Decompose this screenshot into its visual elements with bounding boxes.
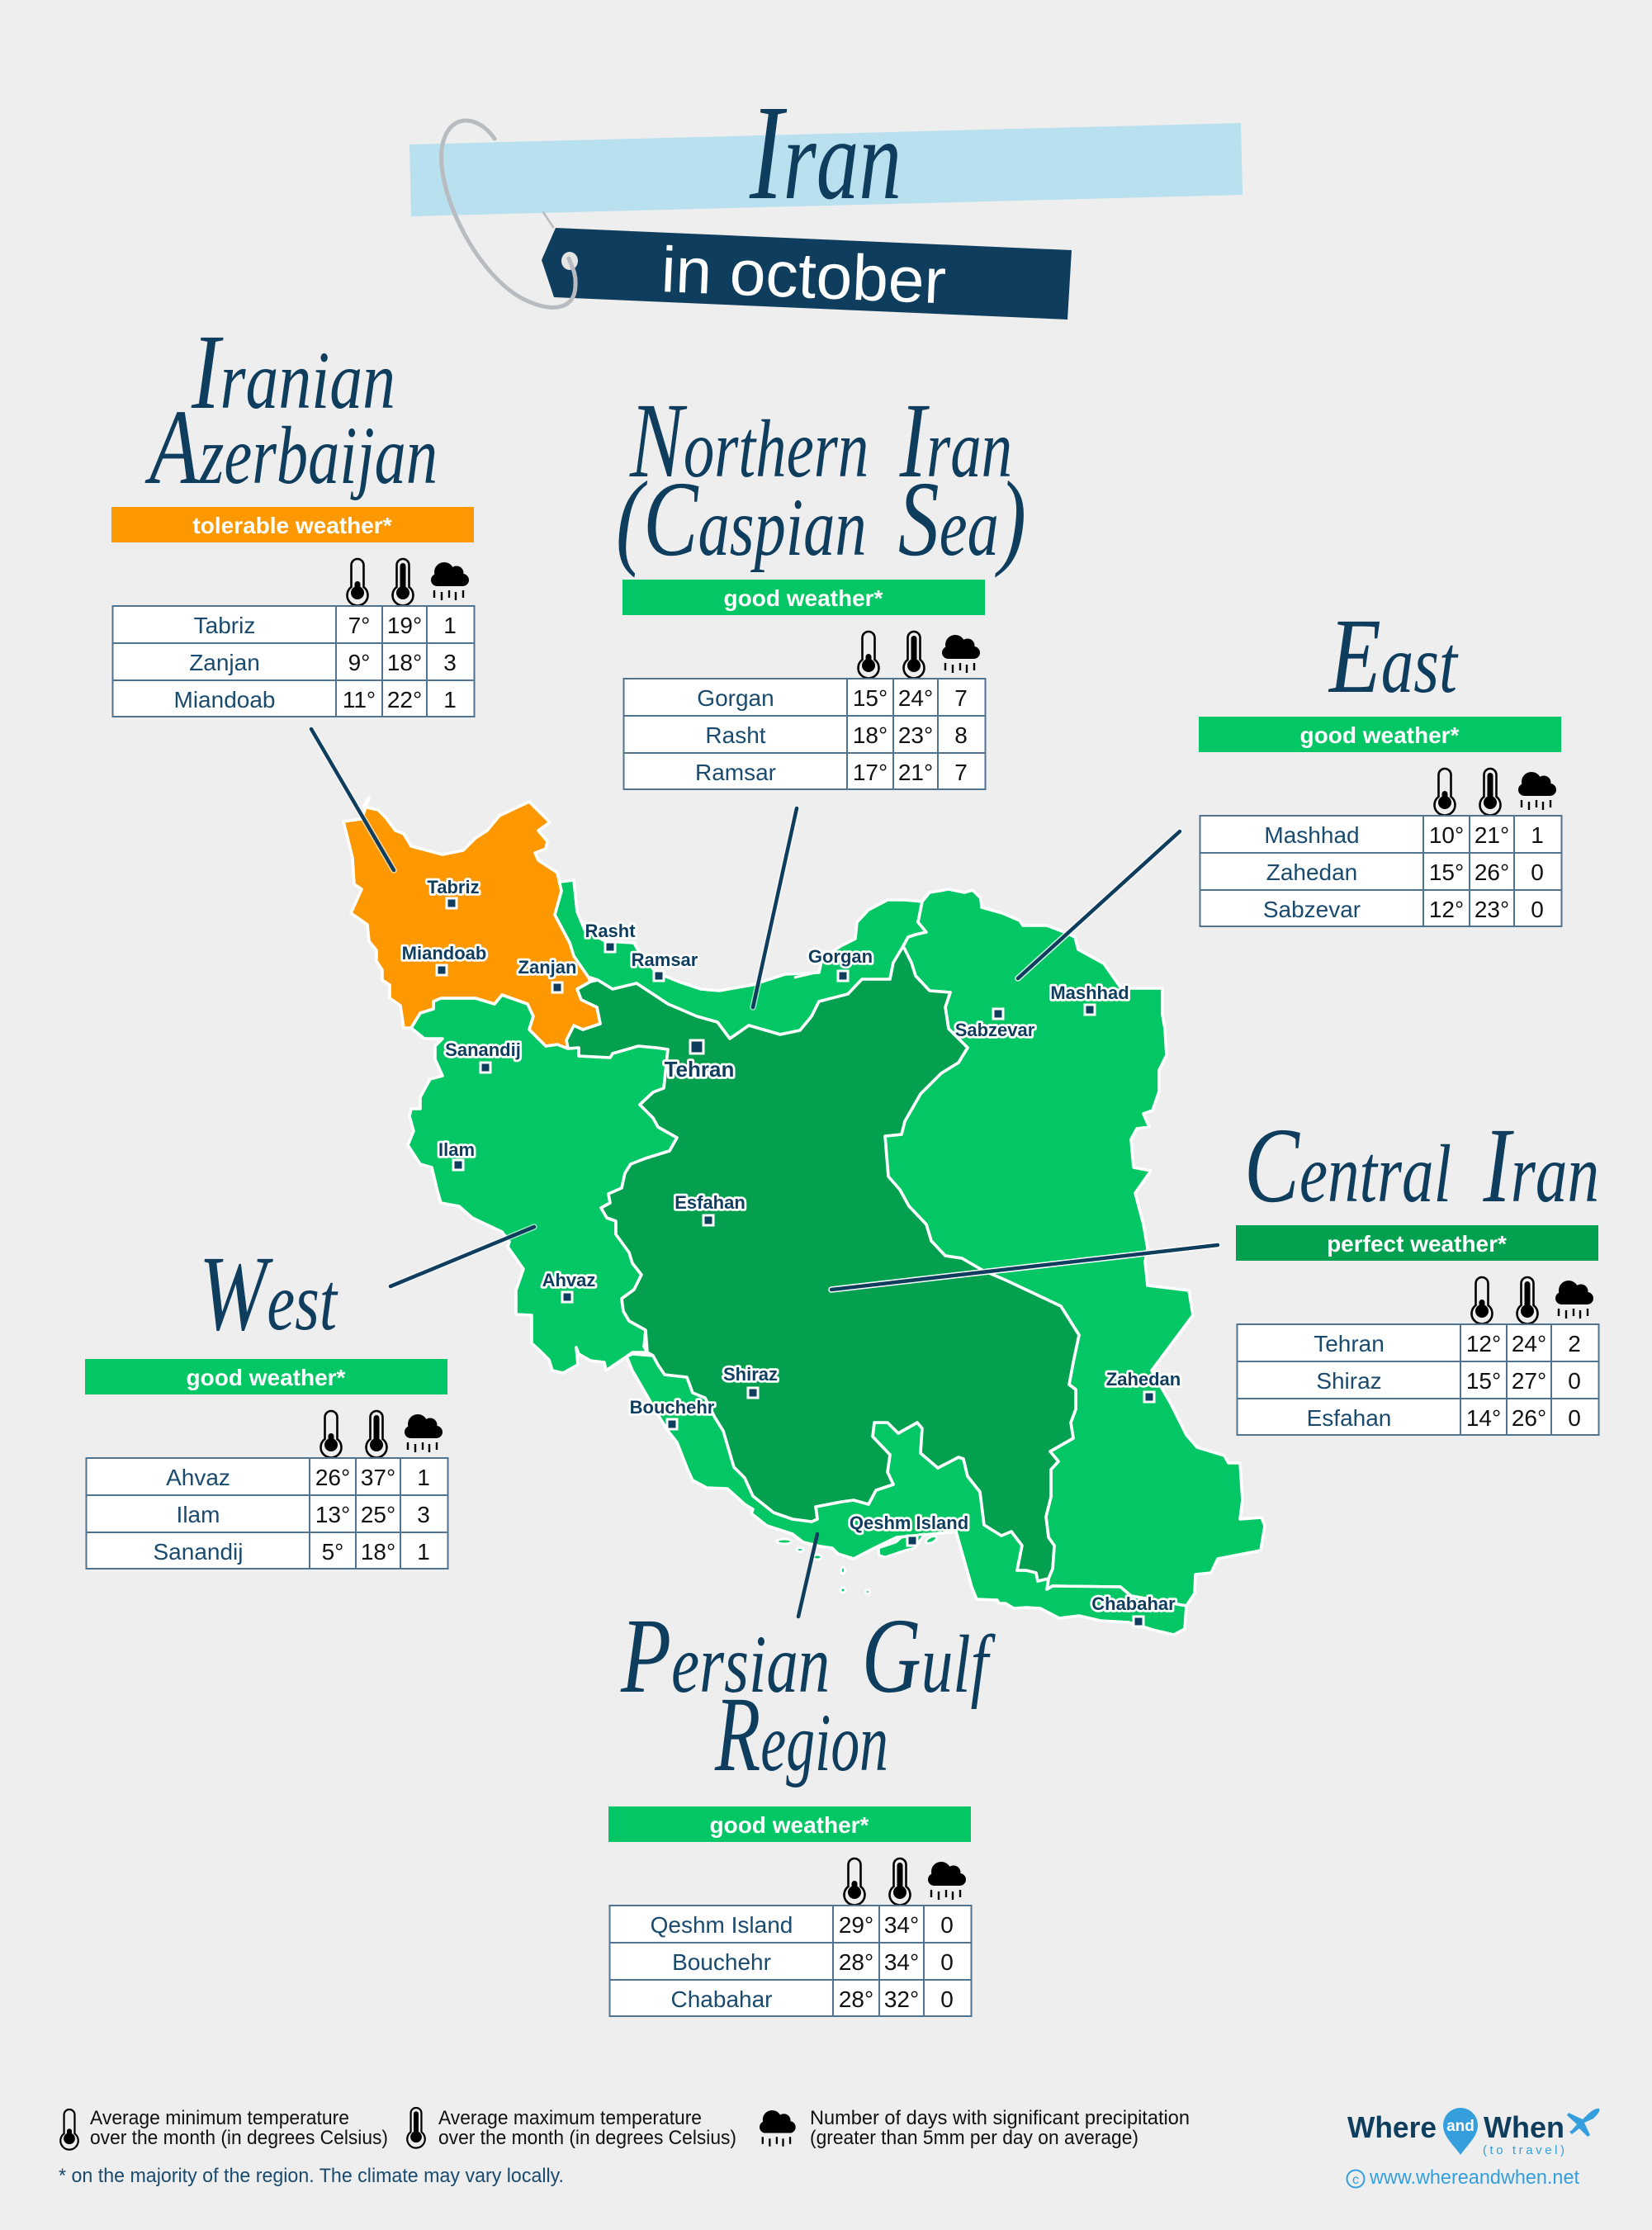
legend: maximum temperature: over the month (in degrees Celsius) xyxy=(438,2127,736,2149)
weather table: East: Mashhad xyxy=(1264,822,1360,848)
weather table: Persian Gulf Region: 34° xyxy=(884,1949,919,1975)
weather table: Northern Iran: 24° xyxy=(898,685,933,711)
legend: maximum temperature xyxy=(407,2107,736,2149)
weather table: Northern Iran: Ramsar xyxy=(695,760,776,785)
weather table: Northern Iran: 23° xyxy=(898,722,933,748)
heading: Persian Gulf Region xyxy=(620,1597,996,1794)
weather table: Persian Gulf Region: 0 xyxy=(940,1949,954,1975)
weather table: East: 1 xyxy=(1531,822,1544,848)
weather table: Central Iran: Shiraz xyxy=(1316,1368,1382,1394)
city markers and labels: Miandoab xyxy=(402,943,486,963)
weather table: Iranian Azerbaijan: Miandoab xyxy=(174,687,275,713)
weather table: Iranian Azerbaijan: 3 xyxy=(443,650,457,675)
city markers and labels: Ilam xyxy=(438,1139,475,1160)
logo: Where and When xyxy=(1347,2108,1599,2189)
weather table: Northern Iran: 18° xyxy=(853,722,888,748)
weather table: Iranian Azerbaijan: 7° xyxy=(348,613,370,638)
heading: Iranian Azerbaijan: Azerbaijan xyxy=(144,388,438,507)
city markers and labels: Tehran xyxy=(665,1057,734,1082)
city markers and labels: Gorgan xyxy=(808,946,873,967)
weather table: Persian Gulf Region: 32° xyxy=(884,1986,919,2012)
legend: maximum temperature: Average maximum temperature xyxy=(438,2107,702,2129)
weather table: Iranian Azerbaijan: 11° xyxy=(343,687,376,713)
islands xyxy=(777,1534,938,1593)
weather table: West: Ilam xyxy=(177,1502,220,1527)
weather table: West: 18° xyxy=(361,1539,395,1565)
weather table: Central Iran: Tehran xyxy=(1314,1331,1385,1356)
title: Iran: Iran xyxy=(749,77,902,228)
weather table: Persian Gulf Region: 29° xyxy=(839,1912,873,1938)
weather table: Central Iran: 0 xyxy=(1568,1405,1581,1431)
city markers and labels: Ramsar xyxy=(632,949,698,970)
weather table: Central Iran: 26° xyxy=(1512,1405,1546,1431)
weather table: East: Zahedan xyxy=(1266,859,1357,885)
region: East xyxy=(885,889,1265,1606)
weather table: Iranian Azerbaijan: 22° xyxy=(387,687,422,713)
heading: Northern Iran (Caspian Sea) xyxy=(616,381,1026,579)
weather table: Persian Gulf Region: 28° xyxy=(839,1949,873,1975)
logo: Where and When: Where xyxy=(1347,2110,1437,2144)
region: Central Iran xyxy=(566,946,1079,1581)
leader: Persian Gulf xyxy=(798,1534,817,1617)
city markers and labels xyxy=(402,877,1181,1626)
leader: Northern Iran xyxy=(753,808,797,1007)
weather table: Iranian Azerbaijan: Zanjan xyxy=(189,650,260,675)
region: Northern Iran xyxy=(555,877,926,1039)
weather table: East: 12° xyxy=(1429,897,1464,922)
region: Persian Gulf xyxy=(627,1354,1186,1635)
website: www.whereandwhen.net xyxy=(1369,2166,1579,2189)
city markers and labels: Rasht xyxy=(585,921,636,941)
weather table: East: 10° xyxy=(1429,822,1464,848)
weather table: East xyxy=(1199,717,1562,926)
weather table: West: 37° xyxy=(361,1465,395,1490)
weather table: East: 23° xyxy=(1474,897,1509,922)
weather table: Persian Gulf Region: 0 xyxy=(940,1912,954,1938)
legend: precipitation xyxy=(760,2107,1190,2149)
weather table: Iranian Azerbaijan xyxy=(111,507,474,717)
weather table: West: 13° xyxy=(315,1502,350,1527)
panel: Persian Gulf Region xyxy=(608,1597,996,2016)
legend: minimum temperature: over the month (in degrees Celsius) xyxy=(90,2127,388,2149)
weather table: East: 26° xyxy=(1474,859,1509,885)
logo: Where and When: and xyxy=(1446,2118,1474,2135)
city markers and labels: Ahvaz xyxy=(542,1270,595,1290)
footnote: * on the majority of the region. The climate may vary locally. xyxy=(59,2165,564,2187)
panel: Northern Iran xyxy=(616,381,1026,789)
tag ring xyxy=(442,121,575,307)
city markers and labels: Esfahan xyxy=(675,1192,746,1213)
weather table: West xyxy=(85,1359,447,1569)
icon: plane xyxy=(1567,2109,1599,2137)
weather table: Central Iran xyxy=(1236,1225,1598,1435)
weather table: Northern Iran: 8 xyxy=(954,722,968,748)
weather table: Northern Iran: 17° xyxy=(853,760,888,785)
weather table: West: 1 xyxy=(417,1465,430,1490)
weather table: Persian Gulf Region: 28° xyxy=(839,1986,873,2012)
weather table: West: good weather* xyxy=(187,1365,346,1390)
weather table: Northern Iran: 7 xyxy=(954,685,968,711)
weather table: East: good weather* xyxy=(1300,722,1460,748)
logo: Where and When: When xyxy=(1484,2110,1564,2144)
city markers and labels: Shiraz xyxy=(723,1364,778,1385)
heading: East: East xyxy=(1328,597,1459,716)
weather table: Northern Iran: good weather* xyxy=(724,585,883,611)
region: West xyxy=(408,995,677,1373)
heading: Iranian Azerbaijan xyxy=(144,313,438,507)
weather table: West: Sanandij xyxy=(154,1539,243,1565)
heading: Persian Gulf Region: Persian Gulf xyxy=(620,1597,996,1716)
weather table: Iranian Azerbaijan: 1 xyxy=(443,687,457,713)
weather table: West: 25° xyxy=(361,1502,395,1527)
weather table: Iranian Azerbaijan: 18° xyxy=(387,650,422,675)
weather table: West: 3 xyxy=(417,1502,430,1527)
city markers and labels: Zanjan xyxy=(518,957,576,978)
region: Iranian Azerbaijan xyxy=(343,798,600,1049)
weather table: Central Iran: perfect weather* xyxy=(1327,1231,1507,1257)
weather table: Iranian Azerbaijan: Tabriz xyxy=(194,613,255,638)
panel: West xyxy=(85,1234,447,1569)
weather table: Northern Iran: 7 xyxy=(954,760,968,785)
website: c xyxy=(1352,2173,1359,2187)
weather table: Persian Gulf Region: 34° xyxy=(884,1912,919,1938)
heading: Northern Iran (Caspian Sea): Northern Iran xyxy=(629,381,1012,500)
city markers and labels: Tabriz xyxy=(427,877,480,897)
panel: Iranian Azerbaijan xyxy=(111,313,474,717)
city markers and labels: Sabzevar xyxy=(955,1020,1035,1040)
weather table: Central Iran: 24° xyxy=(1512,1331,1546,1356)
weather table: Central Iran: 0 xyxy=(1568,1368,1581,1394)
heading: Iranian Azerbaijan: Iranian xyxy=(191,313,395,432)
city markers and labels: Mashhad xyxy=(1050,982,1129,1003)
leader: East xyxy=(1018,831,1180,978)
weather table: Central Iran: Esfahan xyxy=(1307,1405,1391,1431)
weather table: Northern Iran: Gorgan xyxy=(697,685,774,711)
legend: minimum temperature: Average minimum temperature xyxy=(90,2107,349,2129)
weather table: West: 26° xyxy=(315,1465,350,1490)
weather table: Persian Gulf Region: good weather* xyxy=(710,1812,869,1838)
luggage tag: in october xyxy=(542,228,1072,320)
legend: precipitation: Number of days with significant precipitation xyxy=(810,2107,1190,2129)
city markers and labels: Qeshm Island xyxy=(850,1513,968,1533)
city markers and labels: Bouchehr xyxy=(630,1397,715,1418)
weather table: West: 5° xyxy=(322,1539,343,1565)
weather table: Central Iran: 12° xyxy=(1466,1331,1501,1356)
leader: West xyxy=(391,1227,534,1286)
weather table: Persian Gulf Region: Qeshm Island xyxy=(651,1912,793,1938)
weather table: East: 0 xyxy=(1531,859,1544,885)
legend: minimum temperature xyxy=(60,2107,388,2150)
weather table: East: 21° xyxy=(1474,822,1509,848)
weather table: Central Iran: 27° xyxy=(1512,1368,1546,1394)
leader: Azerbaijan xyxy=(311,729,394,870)
leader lines xyxy=(311,729,1218,1617)
heading: Persian Gulf Region: Region xyxy=(714,1675,888,1794)
weather table: Iranian Azerbaijan: 1 xyxy=(443,613,457,638)
weather table: Persian Gulf Region xyxy=(608,1806,971,2016)
title ribbon: light blue bar xyxy=(409,123,1243,216)
city markers and labels: Zahedan xyxy=(1106,1369,1181,1390)
weather table: East: 0 xyxy=(1531,897,1544,922)
weather table: Northern Iran xyxy=(622,580,986,789)
Gorgan bay xyxy=(794,972,819,978)
city markers and labels: Chabahar xyxy=(1091,1593,1176,1614)
legend xyxy=(59,2107,1190,2187)
weather table: West: Ahvaz xyxy=(166,1465,230,1490)
city markers and labels: Sanandij xyxy=(445,1039,521,1060)
panel: East xyxy=(1199,597,1562,926)
weather table: Persian Gulf Region: Chabahar xyxy=(671,1986,772,2012)
logo: Where and When: (to travel) xyxy=(1483,2143,1564,2157)
weather table: Central Iran: 15° xyxy=(1466,1368,1501,1394)
weather table: Persian Gulf Region: 0 xyxy=(940,1986,954,2012)
weather table: Central Iran: 2 xyxy=(1568,1331,1581,1356)
panel: Central Iran xyxy=(1236,1106,1599,1435)
heading: Central Iran: Central Iran xyxy=(1244,1106,1599,1225)
weather table: Persian Gulf Region: Bouchehr xyxy=(672,1949,771,1975)
legend: precipitation: (greater than 5mm per day on average) xyxy=(810,2127,1138,2149)
heading: West: West xyxy=(199,1234,338,1353)
weather table: Northern Iran: 15° xyxy=(853,685,888,711)
heading: Northern Iran (Caspian Sea): (Caspian Sea) xyxy=(616,460,1026,579)
title banner xyxy=(409,77,1243,320)
weather table: Iranian Azerbaijan: tolerable weather* xyxy=(192,513,392,538)
weather table: East: Sabzevar xyxy=(1263,897,1361,922)
weather table: Central Iran: 14° xyxy=(1466,1405,1501,1431)
weather table: East: 15° xyxy=(1429,859,1464,885)
weather table: Northern Iran: 21° xyxy=(898,760,933,785)
luggage tag: in october: in october xyxy=(660,233,948,317)
map of Iran xyxy=(311,729,1265,1635)
weather table: Iranian Azerbaijan: 9° xyxy=(348,650,370,675)
leader: Central Iran xyxy=(831,1245,1218,1290)
icon: map pin xyxy=(1443,2108,1478,2155)
weather table: West: 1 xyxy=(417,1539,430,1565)
weather table: Northern Iran: Rasht xyxy=(705,722,766,748)
weather table: Iranian Azerbaijan: 19° xyxy=(387,613,422,638)
